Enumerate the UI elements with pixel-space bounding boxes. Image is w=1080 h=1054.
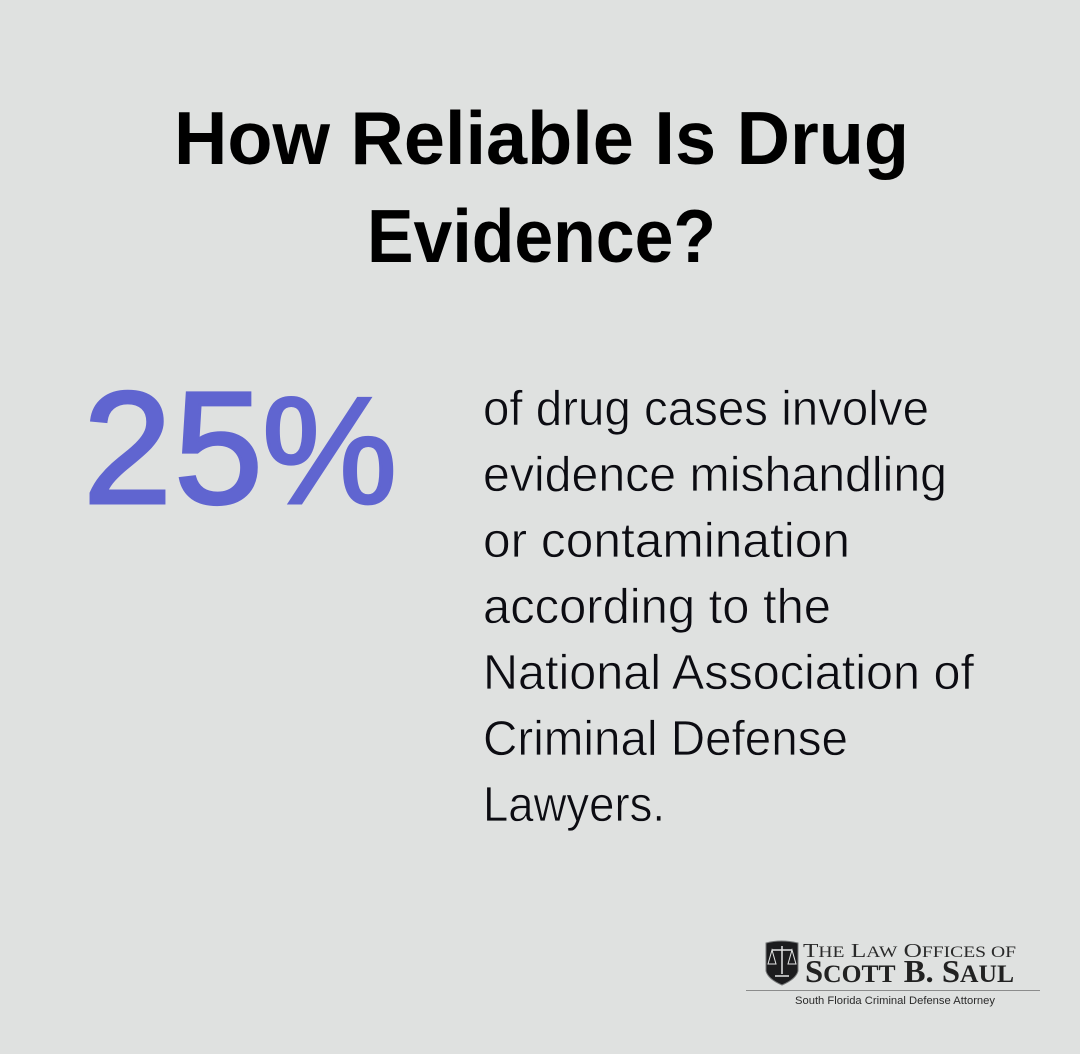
- title: [174, 96, 909, 278]
- title: Evidence?: [367, 194, 716, 278]
- statistic description: [483, 382, 974, 832]
- statistic description: according to the: [483, 580, 831, 634]
- big statistic: 25%: %: [262, 366, 397, 536]
- statistic description: evidence mishandling: [483, 448, 947, 502]
- logo name text: THE L AW O FFICES OF: [803, 940, 1016, 962]
- title: How Reliable Is Drug: [174, 96, 909, 180]
- statistic description: Lawyers.: [483, 778, 665, 832]
- logo tagline: South Florida Criminal Defense Attorney: [795, 995, 996, 1007]
- big statistic: 25%: 5: [174, 358, 263, 537]
- law office logo: SCOTT B. SAUL: [805, 953, 1014, 989]
- big statistic: 25%: 2: [83, 358, 172, 537]
- statistic description: of drug cases involve: [483, 382, 929, 436]
- statistic description: or contamination: [483, 514, 850, 568]
- law office logo: [746, 940, 1040, 1007]
- icon: shield with scales: [766, 941, 798, 985]
- logo divider: [746, 990, 1040, 991]
- statistic description: Criminal Defense: [483, 712, 848, 766]
- statistic description: National Association of: [483, 646, 974, 700]
